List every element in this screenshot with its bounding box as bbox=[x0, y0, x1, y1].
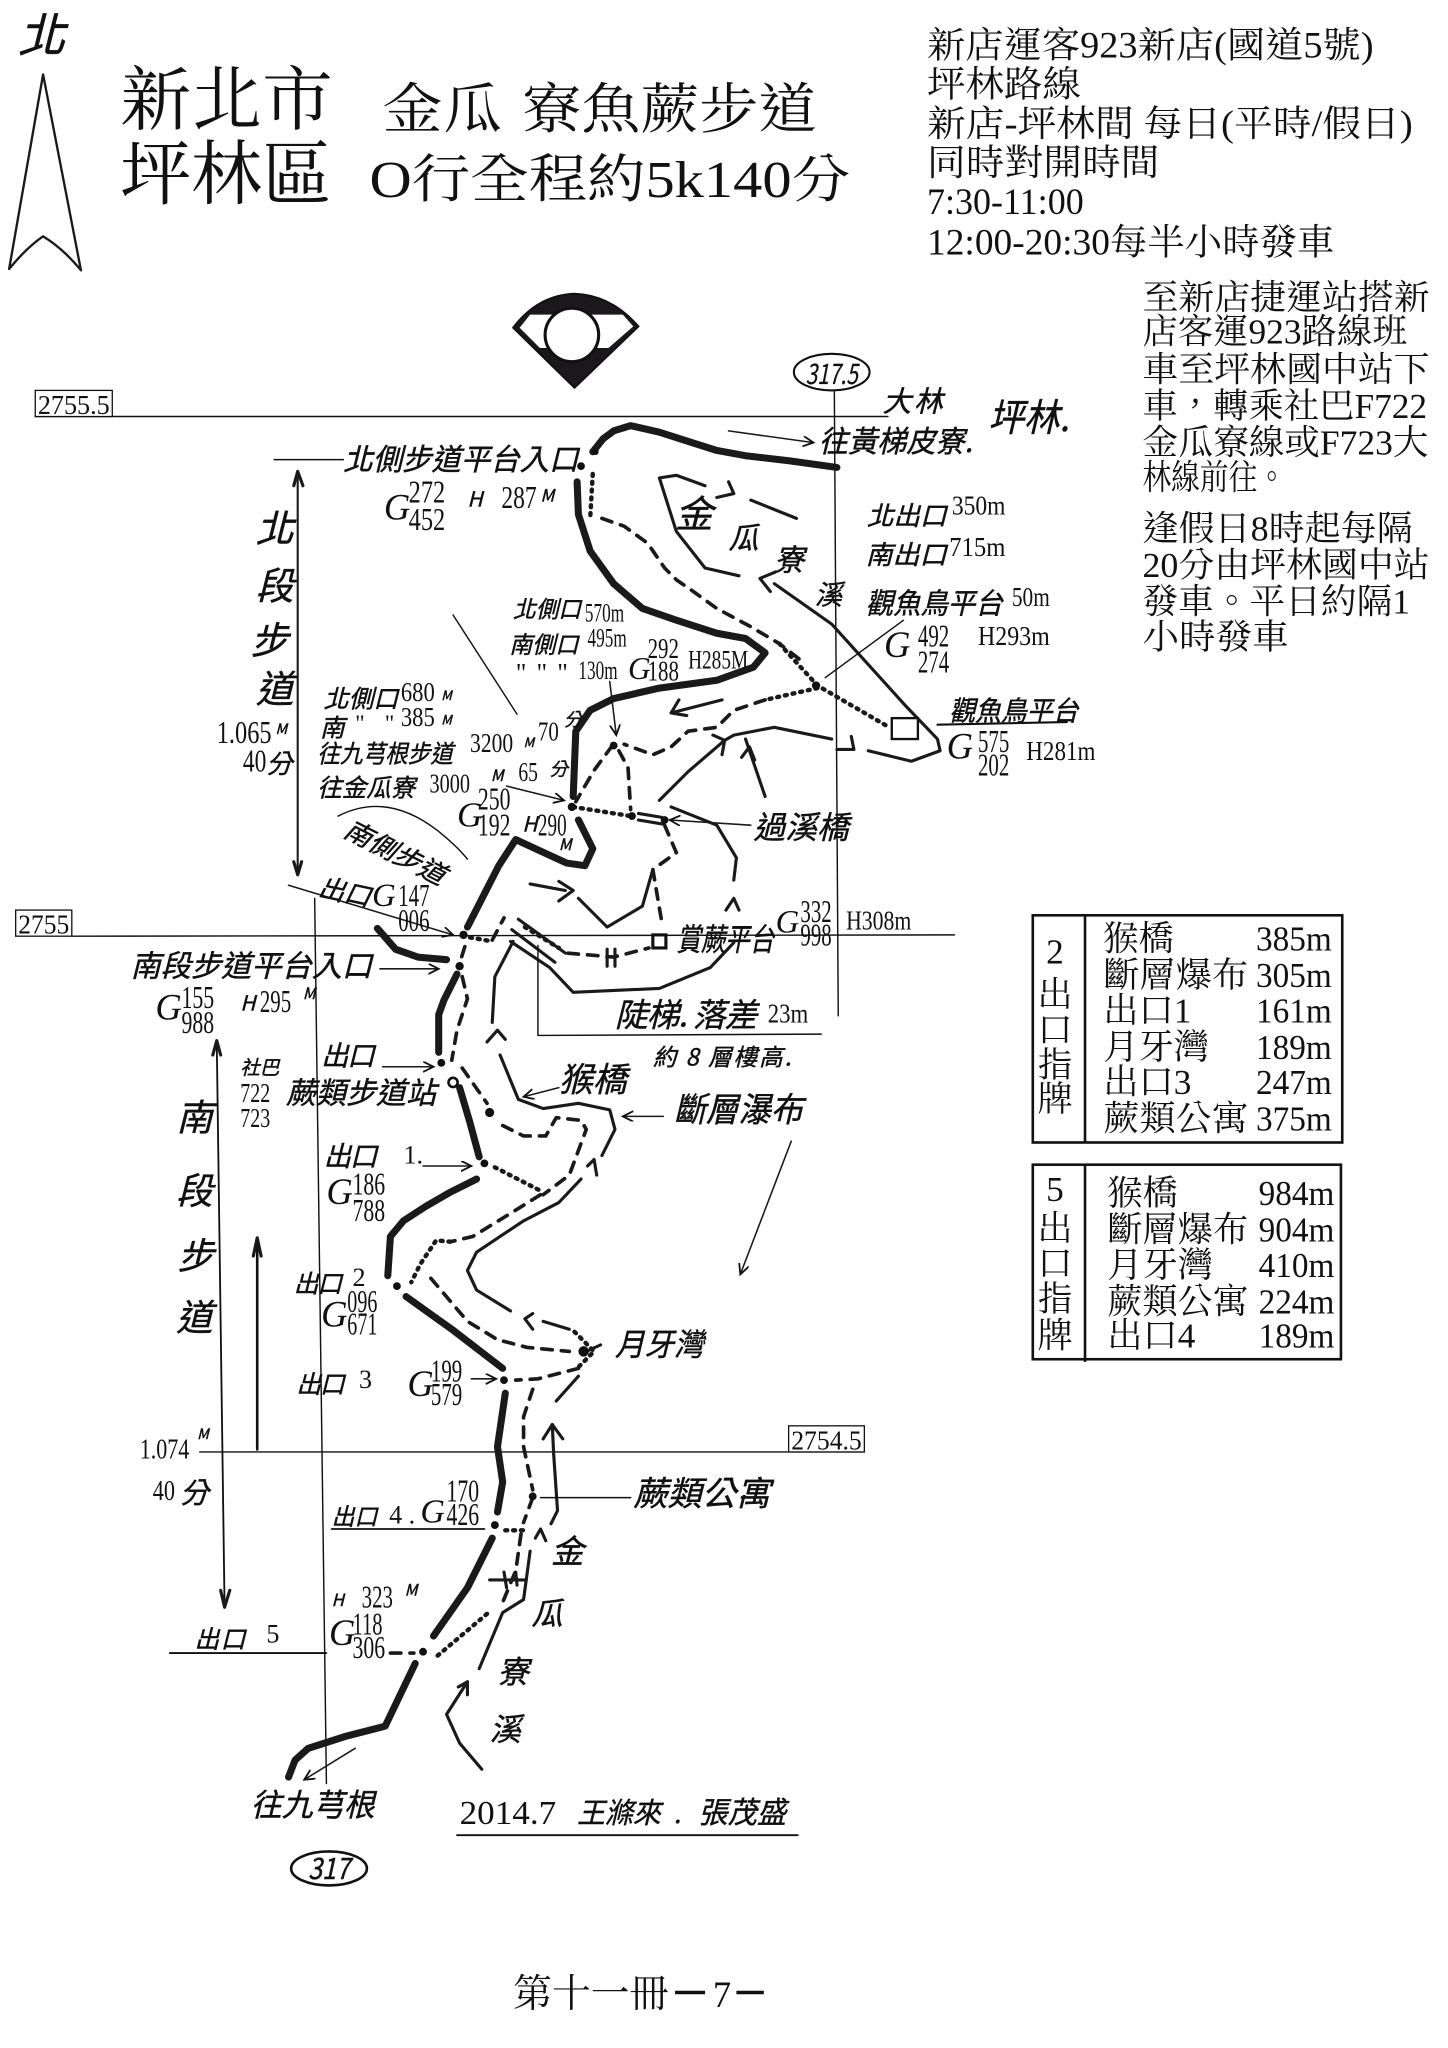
label: north section trail length: 分 bbox=[266, 743, 295, 781]
label: stream name lower: 寮 bbox=[497, 1648, 532, 1693]
table rows: exit 5 distances: 蕨類公寓 bbox=[1107, 1283, 1248, 1322]
label: roads to Dalin and Pinglin: 大林 bbox=[883, 379, 946, 420]
title: trail name and duration bbox=[370, 79, 850, 209]
station: central junction: G bbox=[457, 796, 482, 835]
station: fish-watching platform: 202 bbox=[978, 748, 1009, 783]
title: trail name and duration: O行全程約5k140分 bbox=[370, 151, 850, 209]
bus schedule text bbox=[927, 24, 1413, 263]
station: fish-watching platform bbox=[947, 689, 1095, 783]
station: exit 2: 2 bbox=[353, 1263, 366, 1292]
title: district: 新北市 bbox=[120, 62, 333, 140]
label: north section trail length bbox=[217, 498, 299, 781]
transit directions text: 發車。平日約隔1 bbox=[1142, 583, 1410, 622]
label: north section trail length: M bbox=[275, 718, 288, 739]
station: south side exit: G bbox=[372, 878, 396, 914]
label: stream name lower: 溪 bbox=[490, 1706, 525, 1751]
station: central junction: 192 bbox=[478, 808, 511, 843]
title: district: 坪林區 bbox=[120, 136, 333, 214]
table header: exit 2 signpost: 牌 bbox=[1037, 1080, 1073, 1119]
station: north platform entrance: M bbox=[541, 481, 557, 506]
label: north section trail length: 段 bbox=[256, 555, 297, 610]
station: north platform entrance: H bbox=[467, 484, 484, 514]
label: stream name lower bbox=[490, 1526, 587, 1751]
station: fern trail stop bbox=[240, 1033, 440, 1133]
station: exit 2: 096 bbox=[347, 1284, 377, 1319]
table header: exit 5 signpost: 口 bbox=[1037, 1245, 1073, 1284]
label: distances from fish platform junction: 50m bbox=[1012, 582, 1050, 612]
station: south platform entrance: G bbox=[155, 987, 182, 1028]
label: south section trail: 分 bbox=[180, 1471, 212, 1512]
station: fern trail stop: 723 bbox=[240, 1103, 270, 1133]
label: junction distances north/south side: 570m bbox=[585, 599, 624, 628]
label: connecting trails distances bbox=[317, 677, 584, 804]
table rows: exit 5 distances: 410m bbox=[1259, 1246, 1334, 1285]
bus schedule text: 7:30-11:00 bbox=[927, 181, 1084, 222]
leader lines and arrows bbox=[170, 431, 1067, 1835]
table rows: exit 2 distances bbox=[1103, 920, 1332, 1139]
label: junction distances north/south side: 188 bbox=[648, 655, 679, 687]
station: south side exit: 006 bbox=[398, 903, 430, 938]
station: fern viewing platform bbox=[676, 894, 911, 961]
station: exit 2 bbox=[294, 1263, 377, 1341]
panel: exit 5 signpost table bbox=[1033, 1165, 1341, 1362]
transit directions text: 逢假日8時起每隔 bbox=[1142, 510, 1413, 549]
transit directions text bbox=[1142, 278, 1430, 657]
table rows: exit 2 distances: 猴橋 bbox=[1103, 920, 1174, 959]
station: north platform entrance: G bbox=[384, 487, 410, 528]
label: distances from fish platform junction: 715m bbox=[949, 532, 1005, 562]
station: exit 2: 671 bbox=[347, 1306, 377, 1341]
station: exit 5 bbox=[195, 1578, 419, 1665]
station: north platform entrance: 272 bbox=[409, 475, 445, 510]
station: exit 1: 186 bbox=[353, 1167, 385, 1202]
station: fern viewing platform: 賞蕨平台 bbox=[676, 916, 776, 961]
station: exit 1: 788 bbox=[353, 1193, 385, 1228]
grid line 317 with badge: 317 bbox=[308, 1847, 353, 1888]
station: exit 5: 118 bbox=[353, 1607, 383, 1642]
label: connecting trails distances: M bbox=[441, 685, 453, 704]
label: connecting trails distances: 3000 bbox=[430, 769, 470, 799]
station: fish-watching platform: G bbox=[947, 726, 973, 767]
station: exit 1 bbox=[324, 1134, 423, 1228]
station: fern viewing platform: H308m bbox=[846, 906, 911, 936]
label: roads to Dalin and Pinglin: 往黃梯皮寮. bbox=[819, 417, 973, 461]
label: south section trail: 40 bbox=[153, 1475, 175, 1507]
label: steep stairs note: 23m bbox=[768, 998, 808, 1028]
station: exit 2: G bbox=[321, 1294, 348, 1335]
label: south section trail: M bbox=[197, 1423, 210, 1444]
station: fish-watching platform: 觀魚鳥平台 bbox=[949, 689, 1080, 729]
label: junction distances north/south side: G bbox=[628, 651, 651, 686]
table header: exit 2 signpost: 指 bbox=[1037, 1046, 1073, 1085]
station: south side exit bbox=[316, 866, 430, 938]
label: stream crossing bridge: 過溪橋 bbox=[753, 803, 852, 848]
station: south side exit: 147 bbox=[398, 878, 430, 913]
table rows: exit 5 distances: 出口4 bbox=[1107, 1316, 1196, 1355]
label: connecting trails distances: 分 bbox=[550, 756, 570, 782]
label: connecting trails distances: 70 bbox=[538, 716, 559, 746]
road: thick lines bbox=[289, 426, 837, 1777]
station: central junction bbox=[457, 782, 573, 855]
label: junction distances north/south side: 292 bbox=[648, 633, 679, 665]
label: connecting trails distances: 385 bbox=[401, 702, 435, 732]
table rows: exit 2 distances: 375m bbox=[1256, 1100, 1332, 1139]
label: fault waterfall: 斷層瀑布 bbox=[674, 1083, 807, 1132]
label: north section trail length: 1.065 bbox=[217, 715, 272, 750]
table rows: exit 2 distances: 247m bbox=[1256, 1063, 1332, 1102]
station: fern trail stop: 722 bbox=[240, 1078, 270, 1108]
bus schedule text: 同時對開時間 bbox=[927, 142, 1159, 183]
label: distances from fish platform junction: 492 bbox=[918, 618, 949, 653]
table rows: exit 2 distances: 出口3 bbox=[1103, 1063, 1191, 1102]
station: exit 5: 323 bbox=[362, 1579, 393, 1614]
label: distances from fish platform junction: G bbox=[884, 624, 910, 665]
label: south side trail: 南側步道 bbox=[338, 809, 457, 894]
label: fern apartments: 蕨類公寓 bbox=[633, 1466, 774, 1515]
label: connecting trails distances: M bbox=[524, 732, 536, 751]
table rows: exit 5 distances: 月牙灣 bbox=[1107, 1246, 1213, 1285]
station: central junction: 250 bbox=[478, 782, 511, 817]
author credit: 2014.7 bbox=[460, 1795, 556, 1832]
station: exit 1: 出口 bbox=[324, 1134, 380, 1174]
label: connecting trails distances: 分 bbox=[564, 706, 584, 732]
icon: viewpoint eye symbol bbox=[513, 294, 638, 388]
label: connecting trails distances: 680 bbox=[401, 677, 435, 707]
station: fern viewing platform: 998 bbox=[800, 917, 832, 952]
station: south platform entrance: 155 bbox=[181, 980, 214, 1015]
label: distances from fish platform junction bbox=[866, 490, 1050, 679]
grid line 2755.5 with label bbox=[35, 390, 888, 420]
station: central junction: H bbox=[522, 809, 539, 839]
station: south platform entrance: 南段步道平台入口 bbox=[131, 942, 374, 986]
footer page number: 7 bbox=[713, 1974, 731, 2015]
station: fish-watching platform: H281m bbox=[1026, 736, 1095, 766]
footer page number: 第十一冊 bbox=[513, 1973, 669, 2016]
label: junction distances north/south side: 495m bbox=[588, 623, 627, 652]
station: exit 5: H bbox=[332, 1586, 346, 1611]
label: south section trail: 南 bbox=[176, 1089, 218, 1142]
label: to Jiuqionggen: 往九芎根 bbox=[251, 1781, 377, 1826]
label: north section trail length: 北 bbox=[256, 498, 297, 553]
footer page number bbox=[513, 1973, 764, 2016]
table header: exit 2 signpost: 口 bbox=[1037, 1011, 1073, 1050]
label: south section trail: 步 bbox=[178, 1227, 218, 1280]
table rows: exit 2 distances: 189m bbox=[1256, 1028, 1332, 1067]
station: exit 4: G bbox=[420, 1493, 445, 1530]
label: distances from fish platform junction: H293m bbox=[978, 621, 1050, 651]
station: exit 3: 出口 bbox=[296, 1365, 347, 1401]
station: north platform entrance: 287 bbox=[501, 480, 537, 515]
transit directions text: 店客運923路線班 bbox=[1142, 312, 1408, 351]
table header: exit 5 signpost: 牌 bbox=[1037, 1316, 1073, 1355]
table rows: exit 2 distances: 斷層爆布 bbox=[1103, 956, 1248, 995]
label: north section trail length: 道 bbox=[256, 658, 299, 713]
station: exit 3: 579 bbox=[431, 1377, 462, 1412]
transit directions text: 至新店捷運站搭新 bbox=[1142, 278, 1430, 317]
label: distances from fish platform junction: 北出口 bbox=[867, 495, 949, 533]
bus schedule text: 12:00-20:30每半小時發車 bbox=[927, 222, 1334, 263]
icon: fish-watching platform square bbox=[892, 718, 918, 739]
label: connecting trails distances: " " bbox=[355, 711, 394, 737]
station: exit 1: 1. bbox=[403, 1140, 423, 1169]
table header: exit 5 signpost: 5 bbox=[1046, 1170, 1064, 1209]
transit directions text: 車至坪林國中站下 bbox=[1142, 350, 1430, 389]
station: fern trail stop: 蕨類步道站 bbox=[286, 1068, 440, 1112]
station: exit 5: 出口 bbox=[195, 1620, 248, 1656]
station: fern viewing platform: G bbox=[776, 904, 799, 940]
label: junction distances north/south side: 130m bbox=[578, 656, 618, 685]
table rows: exit 2 distances: 出口1 bbox=[1103, 991, 1191, 1030]
station: exit 3: G bbox=[407, 1363, 434, 1404]
label: roads to Dalin and Pinglin: 坪林. bbox=[988, 387, 1069, 442]
label: south section trail: 1.074 bbox=[140, 1433, 189, 1465]
label: steep stairs note: 陡梯. 落差 bbox=[615, 989, 761, 1036]
station: exit 2: 出口 bbox=[294, 1265, 344, 1301]
table rows: exit 5 distances: 猴橋 bbox=[1107, 1174, 1178, 1213]
label: junction distances north/south side: 南側口 bbox=[509, 626, 580, 660]
label: distances from fish platform junction: 350m bbox=[952, 490, 1005, 520]
station: south platform entrance: 988 bbox=[181, 1005, 214, 1040]
label: connecting trails distances: 3200 bbox=[470, 728, 513, 758]
table rows: exit 2 distances: 蕨類公寓 bbox=[1103, 1100, 1248, 1139]
table header: exit 5 signpost bbox=[1037, 1170, 1073, 1355]
table rows: exit 2 distances: 月牙灣 bbox=[1103, 1028, 1209, 1067]
station: exit 3 bbox=[296, 1353, 462, 1412]
label: south section trail bbox=[140, 1089, 218, 1512]
station: south side exit: 出口 bbox=[316, 866, 376, 915]
station: fern trail stop: 出口 bbox=[321, 1033, 377, 1073]
label: junction distances north/south side bbox=[509, 591, 748, 688]
table rows: exit 5 distances: 斷層爆布 bbox=[1107, 1211, 1248, 1250]
north arrow bbox=[9, 0, 81, 270]
transit directions text: 車，轉乘社巴F722 bbox=[1142, 387, 1427, 426]
grid line 317.5 with badge bbox=[794, 352, 870, 1016]
label: junction distances north/south side: " " " bbox=[516, 659, 568, 688]
station: exit 3: 3 bbox=[359, 1365, 372, 1394]
table rows: exit 5 distances: 984m bbox=[1259, 1174, 1334, 1213]
walking path: dashed route bbox=[390, 518, 803, 1653]
transit directions text: 20分由坪林國中站 bbox=[1142, 546, 1430, 585]
grid line 2755.5 with label: 2755.5 bbox=[38, 390, 110, 420]
table header: exit 5 signpost: 指 bbox=[1037, 1280, 1073, 1319]
title: trail name and duration: 寮魚蕨步道 bbox=[522, 79, 817, 140]
label: south section trail: 道 bbox=[176, 1289, 218, 1342]
table header: exit 2 signpost: 出 bbox=[1037, 976, 1073, 1015]
station: north platform entrance bbox=[343, 435, 580, 537]
grid line 317.5 with badge: 317.5 bbox=[806, 352, 860, 392]
grid line 2755 with label bbox=[16, 910, 954, 940]
label: stream name upper: 溪 bbox=[815, 573, 846, 613]
station: exit 5: 306 bbox=[353, 1630, 385, 1665]
label: connecting trails distances: 65 bbox=[518, 757, 538, 787]
label: connecting trails distances: 南 bbox=[320, 708, 348, 744]
author credit bbox=[460, 1788, 790, 1832]
station: exit 4: 170 bbox=[447, 1474, 479, 1509]
label: crescent bay: 月牙灣 bbox=[615, 1320, 707, 1365]
station: exit 4: 出口 bbox=[332, 1498, 379, 1532]
label: steep stairs note: 約 8 層樓高. bbox=[653, 1038, 791, 1072]
label: connecting trails distances: M bbox=[491, 763, 505, 786]
author credit: 王滌來 bbox=[577, 1791, 664, 1832]
station: fern viewing platform: 332 bbox=[800, 894, 832, 929]
station: south platform entrance: 295 bbox=[260, 984, 291, 1019]
table rows: exit 2 distances: 305m bbox=[1256, 956, 1332, 995]
bus schedule text: 新店-坪林間 每日(平時/假日) bbox=[927, 103, 1413, 144]
station: exit 5: 5 bbox=[266, 1620, 279, 1649]
table rows: exit 5 distances: 189m bbox=[1259, 1316, 1334, 1355]
label: distances from fish platform junction: 南出口 bbox=[866, 534, 949, 572]
table rows: exit 5 distances bbox=[1107, 1174, 1334, 1355]
label: stream name upper: 瓜 bbox=[729, 513, 761, 557]
station: exit 5: M bbox=[405, 1578, 419, 1601]
station: central junction: 290 bbox=[538, 808, 567, 843]
panel: exit 2 signpost table bbox=[1033, 915, 1342, 1142]
table header: exit 2 signpost bbox=[1037, 933, 1073, 1119]
label: roads to Dalin and Pinglin bbox=[819, 379, 1069, 461]
grid line 2754.5 with label: 2754.5 bbox=[791, 1425, 862, 1455]
label: stream name upper: 金 bbox=[675, 484, 717, 539]
station: south platform entrance: M bbox=[303, 981, 317, 1004]
table header: exit 2 signpost: 2 bbox=[1046, 933, 1064, 972]
title: trail name and duration: 金瓜 bbox=[383, 79, 503, 140]
table rows: exit 2 distances: 385m bbox=[1256, 920, 1332, 959]
table header: exit 5 signpost: 出 bbox=[1037, 1209, 1073, 1248]
author credit: 張茂盛 bbox=[699, 1788, 790, 1832]
label: connecting trails distances: 往九芎根步道 bbox=[317, 735, 456, 771]
label: monkey bridge: 猴橋 bbox=[559, 1053, 631, 1102]
station: north platform entrance: 452 bbox=[409, 502, 445, 537]
station: north platform entrance: 北側步道平台入口 bbox=[343, 435, 580, 479]
walking path: dotted sections bbox=[411, 474, 889, 1657]
label: stream name lower: 金 bbox=[551, 1526, 587, 1573]
station: south platform entrance bbox=[131, 942, 374, 1040]
station: exit 4: 4 . bbox=[389, 1501, 415, 1530]
station: central junction: M bbox=[559, 832, 573, 855]
table rows: exit 5 distances: 904m bbox=[1259, 1211, 1334, 1250]
station: exit 1: G bbox=[326, 1171, 353, 1212]
label: south section trail: 段 bbox=[176, 1162, 216, 1215]
label: distances from fish platform junction: 觀魚鳥平台 bbox=[866, 582, 1004, 623]
label: steep stairs note bbox=[615, 989, 808, 1072]
label: junction distances north/south side: H285M bbox=[688, 646, 748, 675]
station: fish-watching platform: 575 bbox=[978, 724, 1009, 759]
label: north section trail length: 步 bbox=[251, 610, 292, 665]
transit directions text: 林線前往。 bbox=[1142, 459, 1286, 498]
station: exit 3: 199 bbox=[431, 1353, 462, 1388]
author credit: . bbox=[674, 1793, 681, 1831]
label: stream name upper: 寮 bbox=[774, 536, 808, 580]
label: connecting trails distances: M bbox=[441, 710, 453, 729]
station: south platform entrance: H bbox=[240, 988, 257, 1018]
grid line 2755 with label: 2755 bbox=[18, 910, 69, 940]
station: exit 4 bbox=[332, 1474, 479, 1532]
junction dots bbox=[393, 449, 820, 1656]
label: stream name upper bbox=[675, 484, 846, 613]
label: junction distances north/south side: 北側口 bbox=[513, 591, 582, 625]
label: distances from fish platform junction: 274 bbox=[918, 644, 949, 679]
table rows: exit 2 distances: 161m bbox=[1256, 991, 1332, 1030]
stream: medium lines bbox=[447, 475, 940, 1769]
table rows: exit 5 distances: 224m bbox=[1259, 1283, 1334, 1322]
grid line 2754.5 with label bbox=[200, 1425, 864, 1455]
station: exit 5: G bbox=[329, 1612, 355, 1653]
label: north section trail length: 40 bbox=[243, 744, 266, 779]
station: fern trail stop: 社巴 bbox=[240, 1052, 281, 1081]
transit directions text: 小時發車 bbox=[1142, 618, 1289, 657]
bus schedule text: 新店運客923新店(國道5號) bbox=[927, 24, 1374, 65]
station: exit 4: 426 bbox=[447, 1497, 479, 1532]
label: connecting trails distances: 往金瓜寮 bbox=[317, 768, 418, 804]
transit directions text: 金瓜寮線或F723大 bbox=[1142, 423, 1428, 462]
title: district bbox=[120, 62, 333, 214]
grid line 317 with badge bbox=[291, 898, 367, 1888]
bus schedule text: 坪林路線 bbox=[927, 64, 1081, 105]
label: stream name lower: 瓜 bbox=[531, 1589, 564, 1634]
label: connecting trails distances: 北側口 bbox=[324, 680, 400, 716]
